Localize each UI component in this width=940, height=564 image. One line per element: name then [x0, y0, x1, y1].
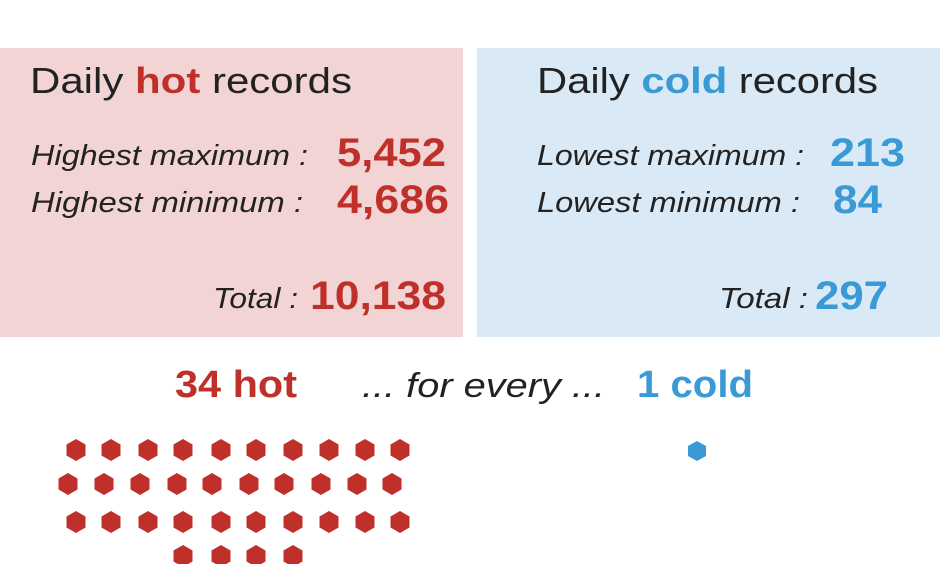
- number: 213: 213: [830, 131, 905, 175]
- label: 34 hot: 34 hot: [175, 364, 297, 406]
- label: for every: ... for every ...: [362, 367, 605, 405]
- text: lowest minimum: Lowest minimum :: [537, 187, 800, 219]
- hexagon: 1 cold: [688, 441, 706, 461]
- number: 297: 297: [815, 274, 888, 318]
- text: total cold: Total :: [719, 283, 808, 315]
- heading: daily hot records: Daily hot records: [30, 60, 352, 101]
- number: 5,452: 5,452: [337, 131, 446, 175]
- number: 4,686: 4,686: [337, 178, 449, 222]
- text: total hot: Total :: [213, 283, 298, 315]
- text: lowest maximum: Lowest maximum :: [537, 140, 804, 172]
- text: highest maximum: Highest maximum :: [31, 140, 308, 172]
- label: 1 cold: 1 cold: [637, 364, 753, 406]
- panel: hot records: [0, 48, 463, 337]
- number: 84: 84: [833, 178, 883, 222]
- number: 10,138: 10,138: [310, 274, 446, 318]
- text: highest minimum: Highest minimum :: [31, 187, 303, 219]
- hexagon grid: 34 hot: [58, 439, 410, 564]
- panel: cold records: [477, 48, 940, 337]
- heading: daily cold records: Daily cold records: [537, 60, 878, 101]
- ratio line: [175, 364, 753, 406]
